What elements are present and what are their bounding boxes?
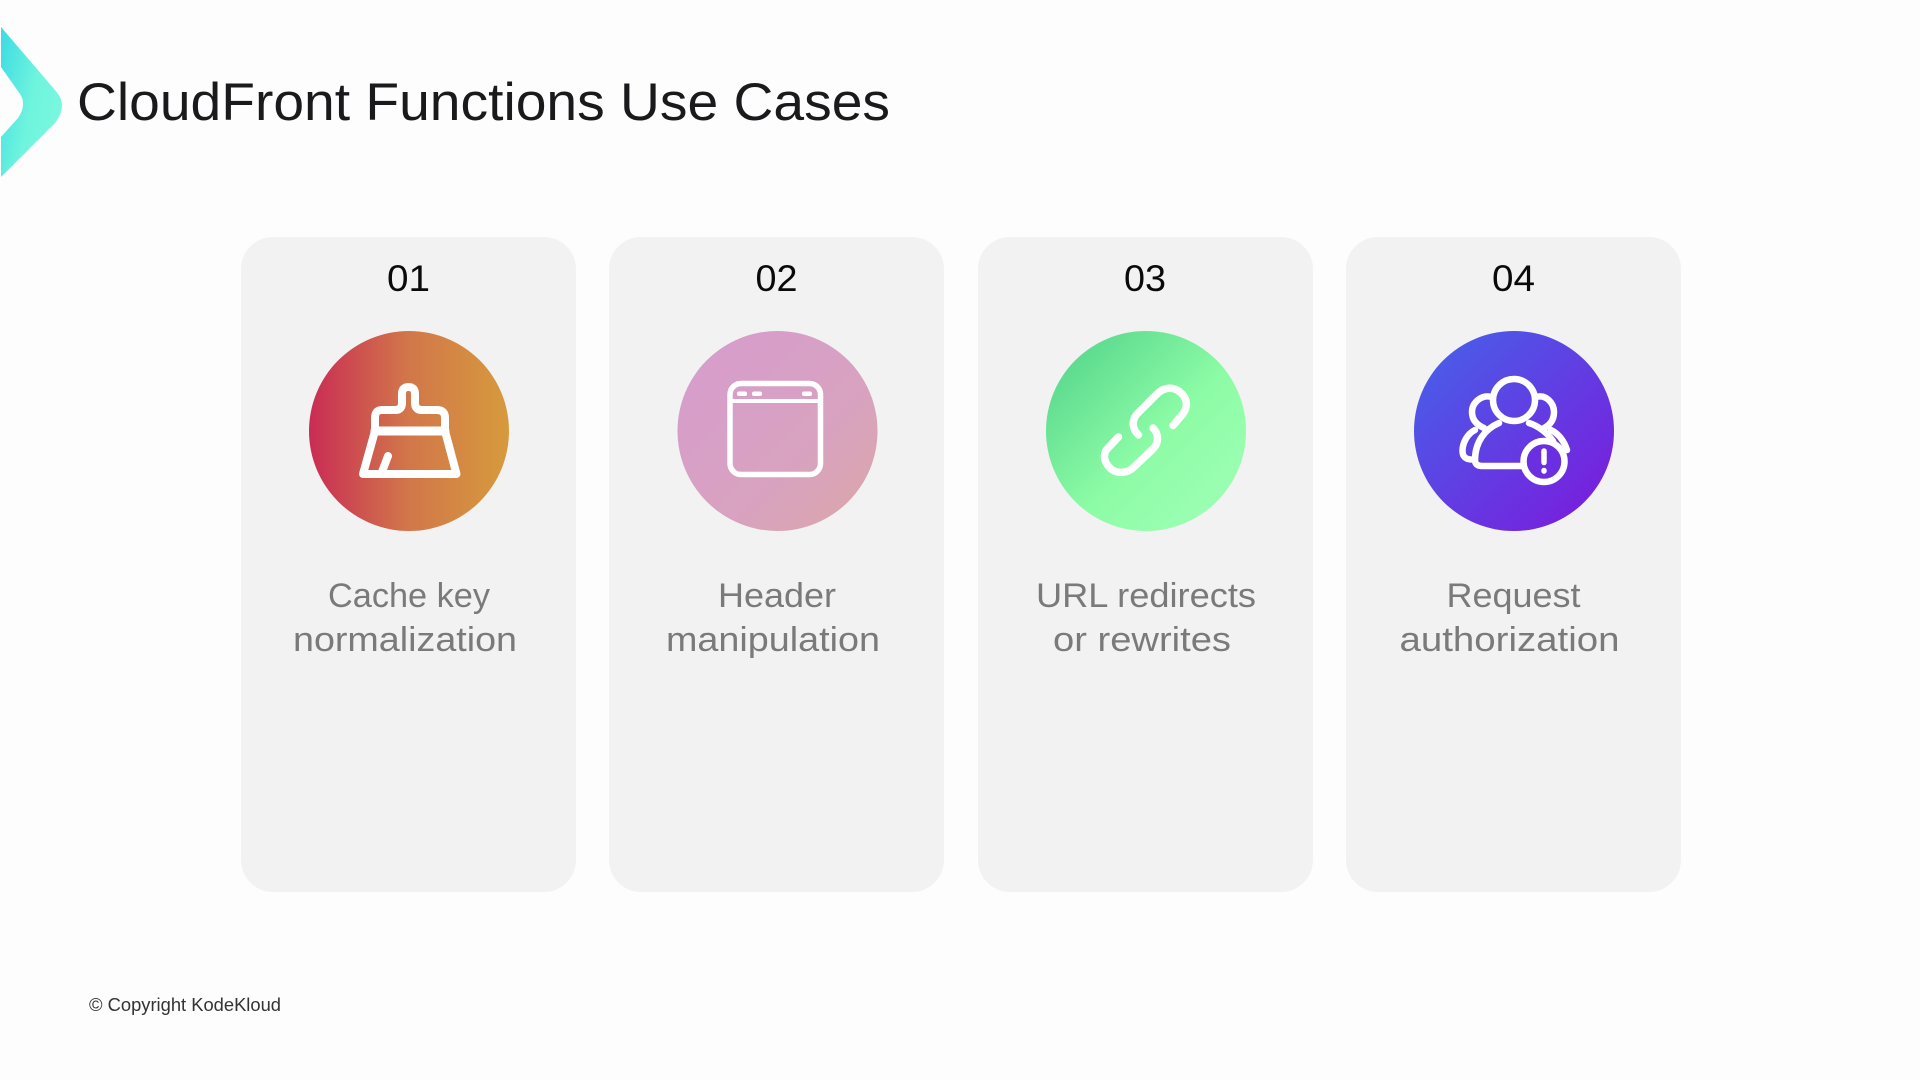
icon: users with alert badge (1462, 379, 1567, 482)
label: cache key normalization (293, 577, 517, 659)
panel: card 03 url redirects or rewrites (978, 237, 1313, 892)
icon: chevron arrow (1, 27, 62, 177)
label: header manipulation: manipulation (666, 621, 880, 659)
number 04: 04 (1492, 258, 1535, 299)
label: url redirects or rewrites: or rewrites (1053, 621, 1231, 659)
icon: browser window (730, 384, 820, 474)
icon: chain link (1104, 388, 1186, 472)
panel: card 01 cache key normalization (241, 237, 576, 892)
label: url redirects or rewrites: URL redirects (1036, 577, 1256, 615)
icon circle: purple gradient (1414, 331, 1614, 531)
icon circle: pink gradient (678, 331, 878, 531)
panel: card 04 request authorization (1346, 237, 1681, 892)
icon circle: green gradient (1046, 331, 1246, 531)
number 02: 02 (756, 258, 798, 299)
label: request authorization: Request (1446, 577, 1581, 615)
label: request authorization: authorization (1400, 621, 1620, 659)
icon circle: orange gradient (309, 331, 509, 531)
label: url redirects or rewrites (1036, 577, 1256, 659)
label: request authorization (1400, 577, 1620, 659)
icon: broom (363, 387, 456, 474)
number 01: 01 (387, 258, 430, 299)
label: cache key normalization: normalization (293, 621, 517, 659)
panel: card 02 header manipulation (609, 237, 944, 892)
label: header manipulation (666, 577, 880, 659)
number 03: 03 (1124, 258, 1166, 299)
label: cache key normalization: Cache key (328, 577, 490, 615)
title: CloudFront Functions Use Cases (77, 73, 890, 132)
copyright footer: © Copyright KodeKloud (89, 995, 281, 1015)
label: header manipulation: Header (718, 577, 836, 615)
